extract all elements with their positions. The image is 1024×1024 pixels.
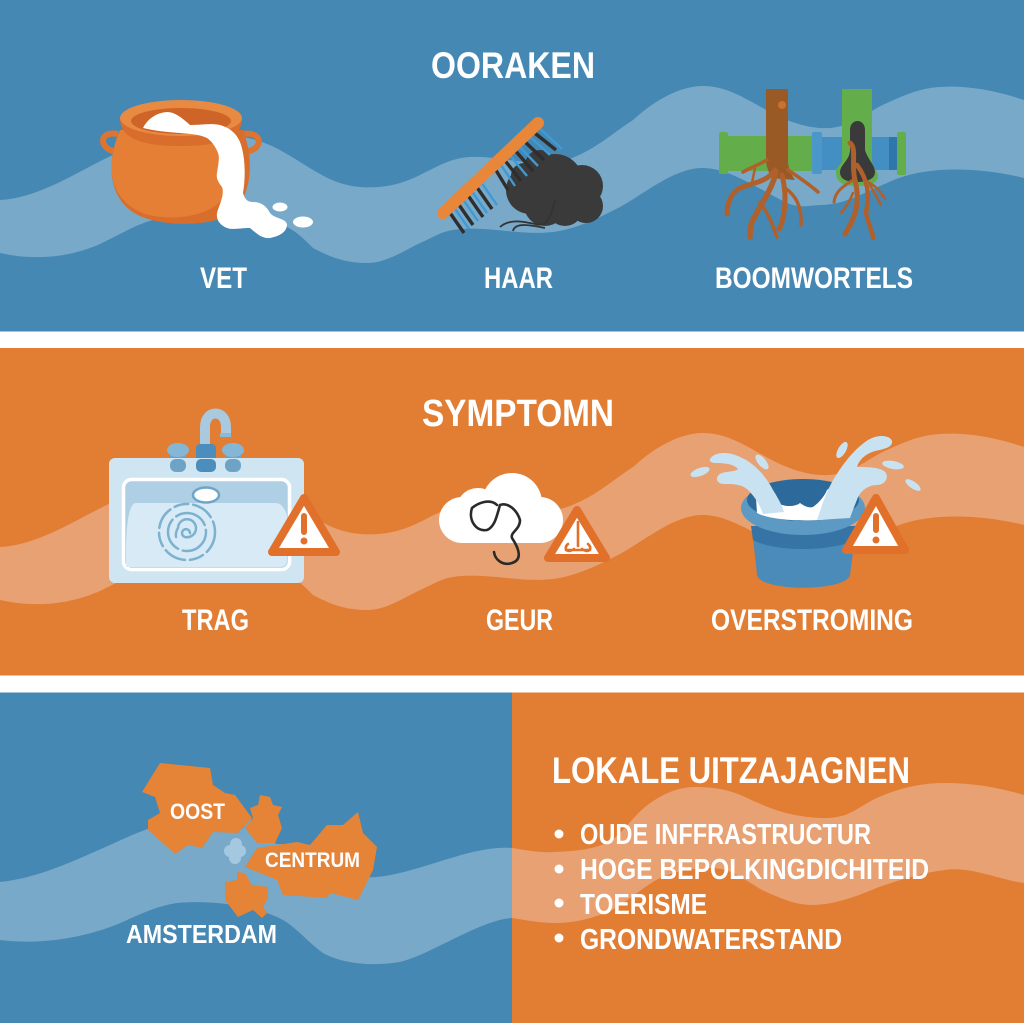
label: smell: GEUR — [486, 604, 553, 637]
map: districts — [142, 763, 377, 918]
label: Amsterdam: AMSTERDAM — [126, 919, 277, 949]
heading: symptoms: SYMPTOMN — [422, 393, 614, 435]
list: local challenges — [554, 819, 929, 956]
heading: local challenges: LOKALE UITZAJAGNEN — [552, 750, 910, 791]
icon: warning triangle, nose — [548, 510, 606, 558]
icon: warning triangle, sink — [272, 498, 336, 552]
label: flooding: OVERSTROMING — [711, 604, 913, 637]
label: hair: HAAR — [484, 262, 553, 295]
icon: pot with fat — [103, 100, 313, 238]
icon: warning triangle, bucket — [846, 498, 905, 550]
heading: causes: OORAKEN — [431, 45, 595, 86]
label: Oost: OOST — [170, 799, 225, 824]
label: tree roots: BOOMWORTELS — [715, 262, 913, 295]
list: local challenges: TOERISME — [580, 889, 707, 921]
panel: symptoms — [0, 348, 1024, 676]
panel: causes — [0, 0, 1024, 332]
list: local challenges: OUDE INFFRASTRUCTUR — [580, 819, 871, 851]
icon: brush with hair — [443, 123, 603, 233]
icon: slow sink — [109, 414, 304, 583]
icon: smell cloud — [439, 473, 563, 564]
label: Centrum: CENTRUM — [265, 849, 360, 872]
list: local challenges: HOGE BEPOLKINGDICHITEID — [580, 854, 929, 886]
label: fat: VET — [200, 262, 247, 295]
panel: Amsterdam map — [0, 692, 512, 1023]
panel: local challenges — [512, 692, 1024, 1023]
label: slow: TRAG — [182, 604, 249, 637]
icon: tree roots in pipes — [719, 89, 906, 238]
list: local challenges: GRONDWATERSTAND — [580, 924, 842, 956]
icon: overflowing bucket — [689, 436, 922, 588]
